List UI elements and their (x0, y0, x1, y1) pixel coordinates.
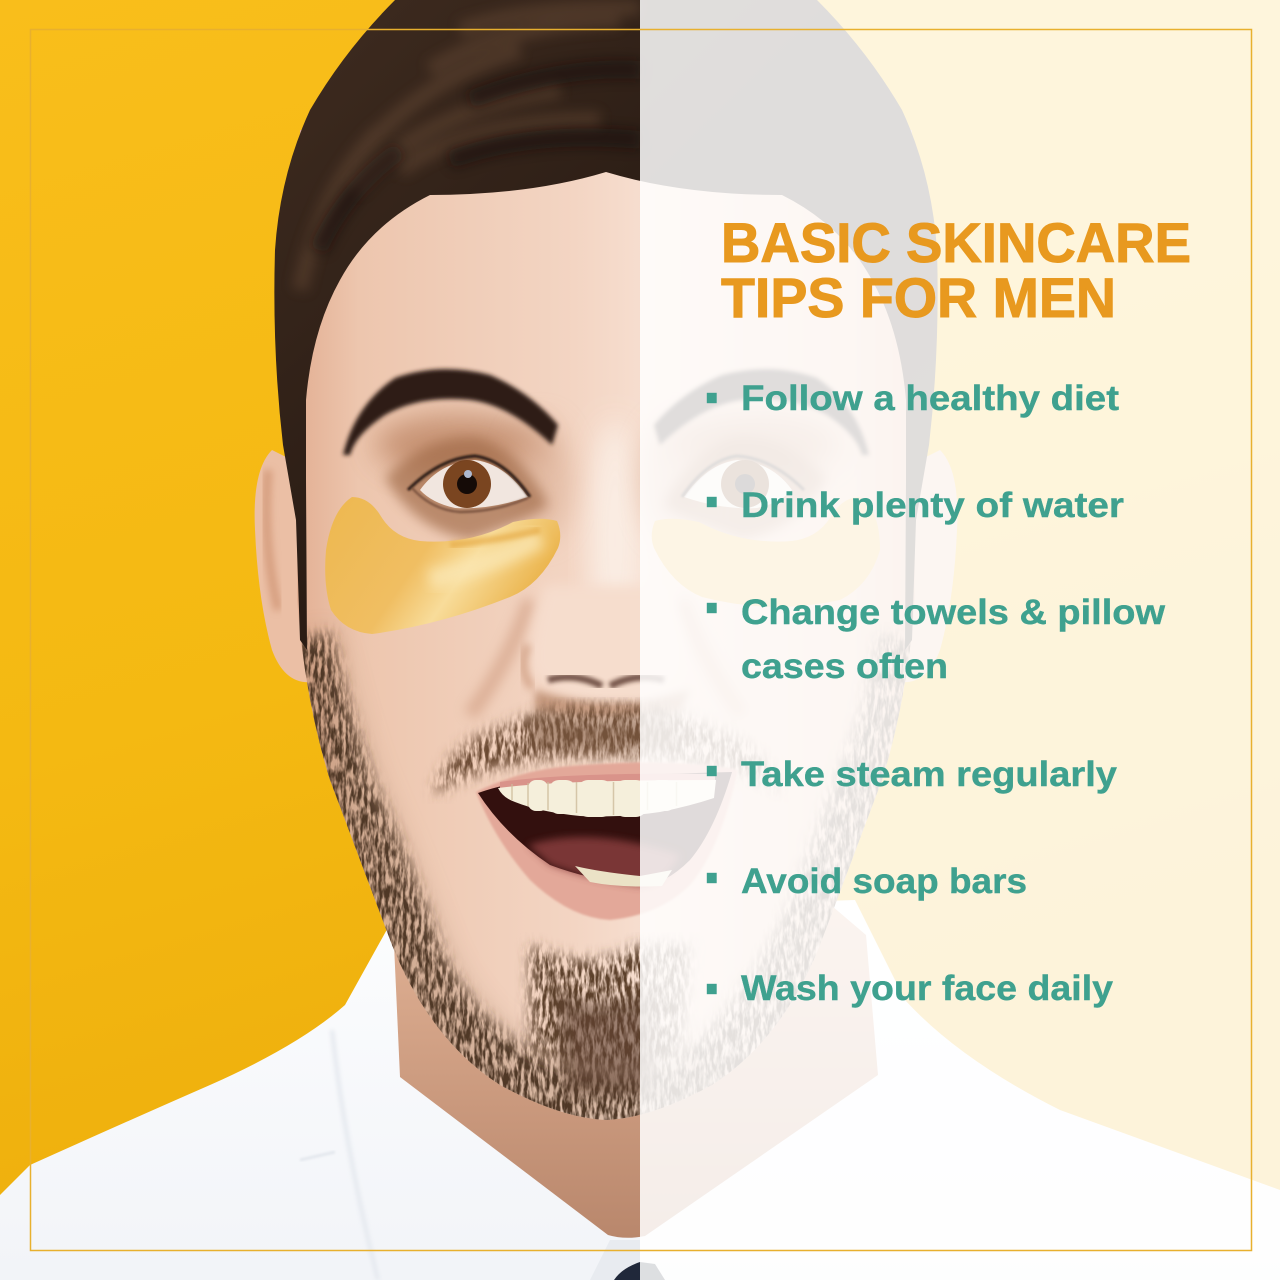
left eye (385, 437, 548, 540)
title: TIPS FOR MEN (721, 266, 1116, 329)
title: BASIC SKINCARE (721, 211, 1191, 274)
gum line (500, 774, 715, 790)
right eyebrow (654, 369, 869, 455)
face (297, 130, 915, 1120)
tongue (528, 837, 680, 886)
shirt (0, 900, 1280, 1280)
tip: take steam regularly: Take steam regularly (741, 755, 1118, 794)
tip: follow a healthy diet: Follow a healthy diet (741, 379, 1119, 418)
mouth (476, 762, 738, 920)
tip: avoid soap bars: Avoid soap bars (741, 862, 1027, 901)
hair (274, 0, 938, 650)
lower teeth (575, 866, 672, 886)
ears (255, 450, 957, 682)
face shading (375, 413, 837, 715)
tip: drink plenty of water: Drink plenty of water (741, 486, 1124, 525)
nose (523, 585, 690, 717)
tips list (707, 379, 1166, 1008)
left under-eye gold patch (325, 497, 560, 634)
right under-eye gold patch (652, 497, 880, 607)
upper teeth (498, 780, 716, 817)
beard (302, 640, 908, 1101)
title (721, 211, 1191, 329)
tip: change towels and pillow cases: cases often (741, 647, 948, 686)
lips (476, 762, 738, 920)
right eye (664, 437, 827, 540)
tip: change towels and pillow cases (707, 593, 1166, 686)
left eyebrow (343, 369, 558, 455)
mouth interior (478, 772, 732, 886)
translucent white right panel (640, 0, 1280, 1280)
tip: change towels and pillow cases: Change towels & pillow (741, 593, 1166, 632)
neck (392, 900, 878, 1238)
tooth separators (512, 782, 676, 815)
tip: wash your face daily: Wash your face daily (741, 969, 1114, 1008)
